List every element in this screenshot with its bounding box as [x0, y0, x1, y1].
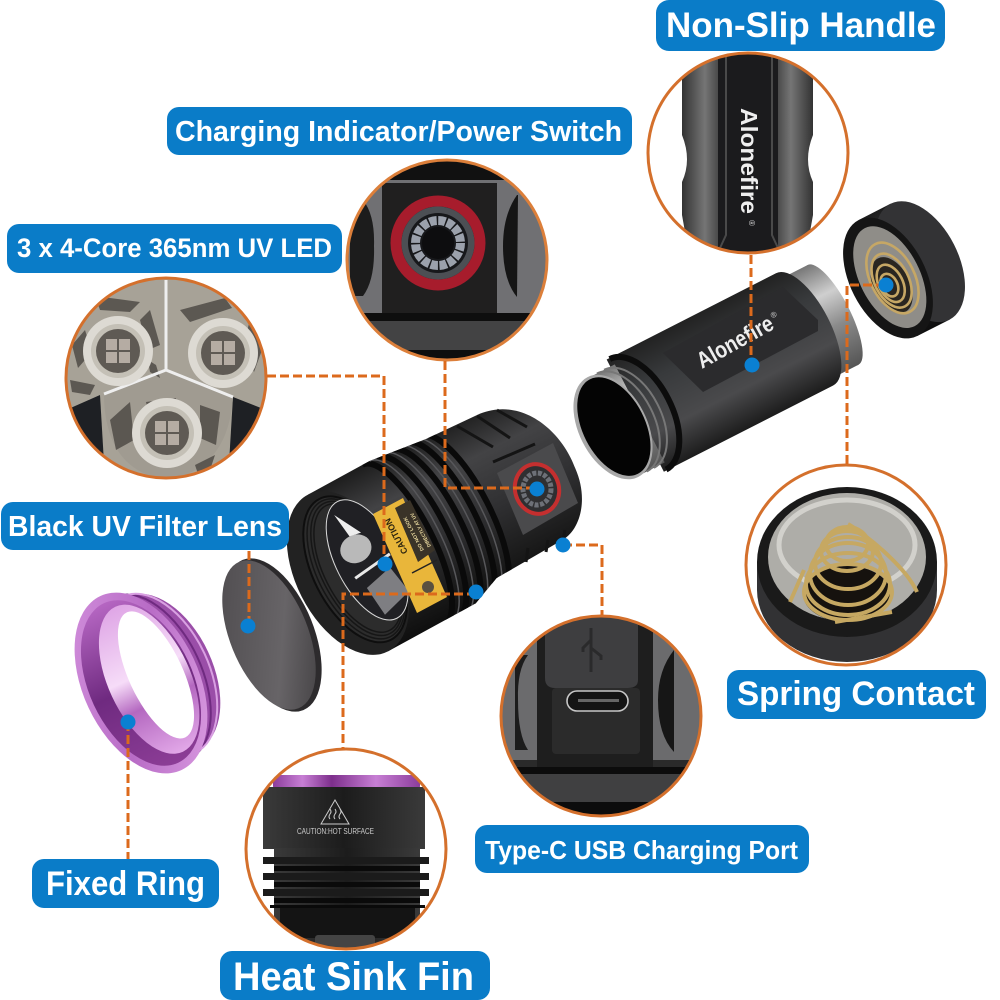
leader line: USB: [563, 545, 602, 615]
circle detail: non-slip handle: Alonefire: [736, 108, 762, 214]
head details: button panel and ridges: [457, 410, 578, 562]
label: Type-C USB Charging Port: Type-C USB Charging Port: [485, 835, 798, 865]
label: 3 x 4-Core 365nm UV LED: 3 x 4-Core 365nm UV LED: [17, 233, 332, 263]
caution sticker: DO NOT LOOK: [402, 515, 426, 552]
leader line: filter lens: [248, 551, 250, 626]
caution sticker: CAUTION: [383, 517, 410, 556]
leader line: heat sink: [343, 594, 476, 749]
label: Spring Contact: Spring Contact: [737, 675, 975, 713]
anchor dots: [120, 278, 894, 730]
battery tube: [554, 251, 877, 499]
tube grip panel: [663, 287, 818, 392]
label: Heat Sink Fin: Heat Sink Fin: [233, 955, 474, 999]
circle detail: heat sink fin: [246, 749, 446, 950]
leader line: handle: [750, 255, 752, 365]
fixed ring: [48, 565, 249, 795]
tube logo: ®: [769, 310, 779, 320]
label: Fixed Ring: Fixed Ring: [46, 865, 205, 903]
label: Type-C USB Charging Port: [475, 825, 809, 873]
leader line: LED: [267, 376, 384, 564]
circle detail: spring contact: [746, 465, 946, 665]
label: Black UV Filter Lens: Black UV Filter Lens: [8, 511, 282, 543]
label: Non-Slip Handle: Non-Slip Handle: [666, 6, 936, 45]
caution sticker: [373, 498, 447, 613]
tube logo: Alonefire: [692, 310, 778, 373]
leader line: fixed ring: [126, 722, 130, 860]
label: 3 x 4-Core 365nm UV LED: [7, 224, 342, 273]
power button: [507, 457, 567, 521]
black UV filter lens: [203, 545, 341, 725]
label: Black UV Filter Lens: [1, 502, 289, 550]
label: Charging Indicator/Power Switch: Charging Indicator/Power Switch: [175, 116, 622, 148]
leader line: spring contact: [847, 285, 885, 464]
flashlight head: [287, 409, 582, 655]
circle detail: UV LEDs: [60, 278, 270, 480]
label: Charging Indicator/Power Switch: [167, 107, 632, 155]
circle detail: non-slip handle: ®: [747, 220, 756, 226]
caution sticker: DIRECTLY AT UV: [409, 511, 433, 548]
end cap with spring: [825, 186, 983, 353]
circle detail: heat sink fin: CAUTION:HOT SURFACE: [297, 826, 374, 836]
circle detail: USB port: [495, 610, 710, 822]
circle detail: non-slip handle: [648, 40, 848, 260]
circle detail: charging indicator: [340, 160, 560, 362]
leader line: charging: [445, 361, 537, 488]
